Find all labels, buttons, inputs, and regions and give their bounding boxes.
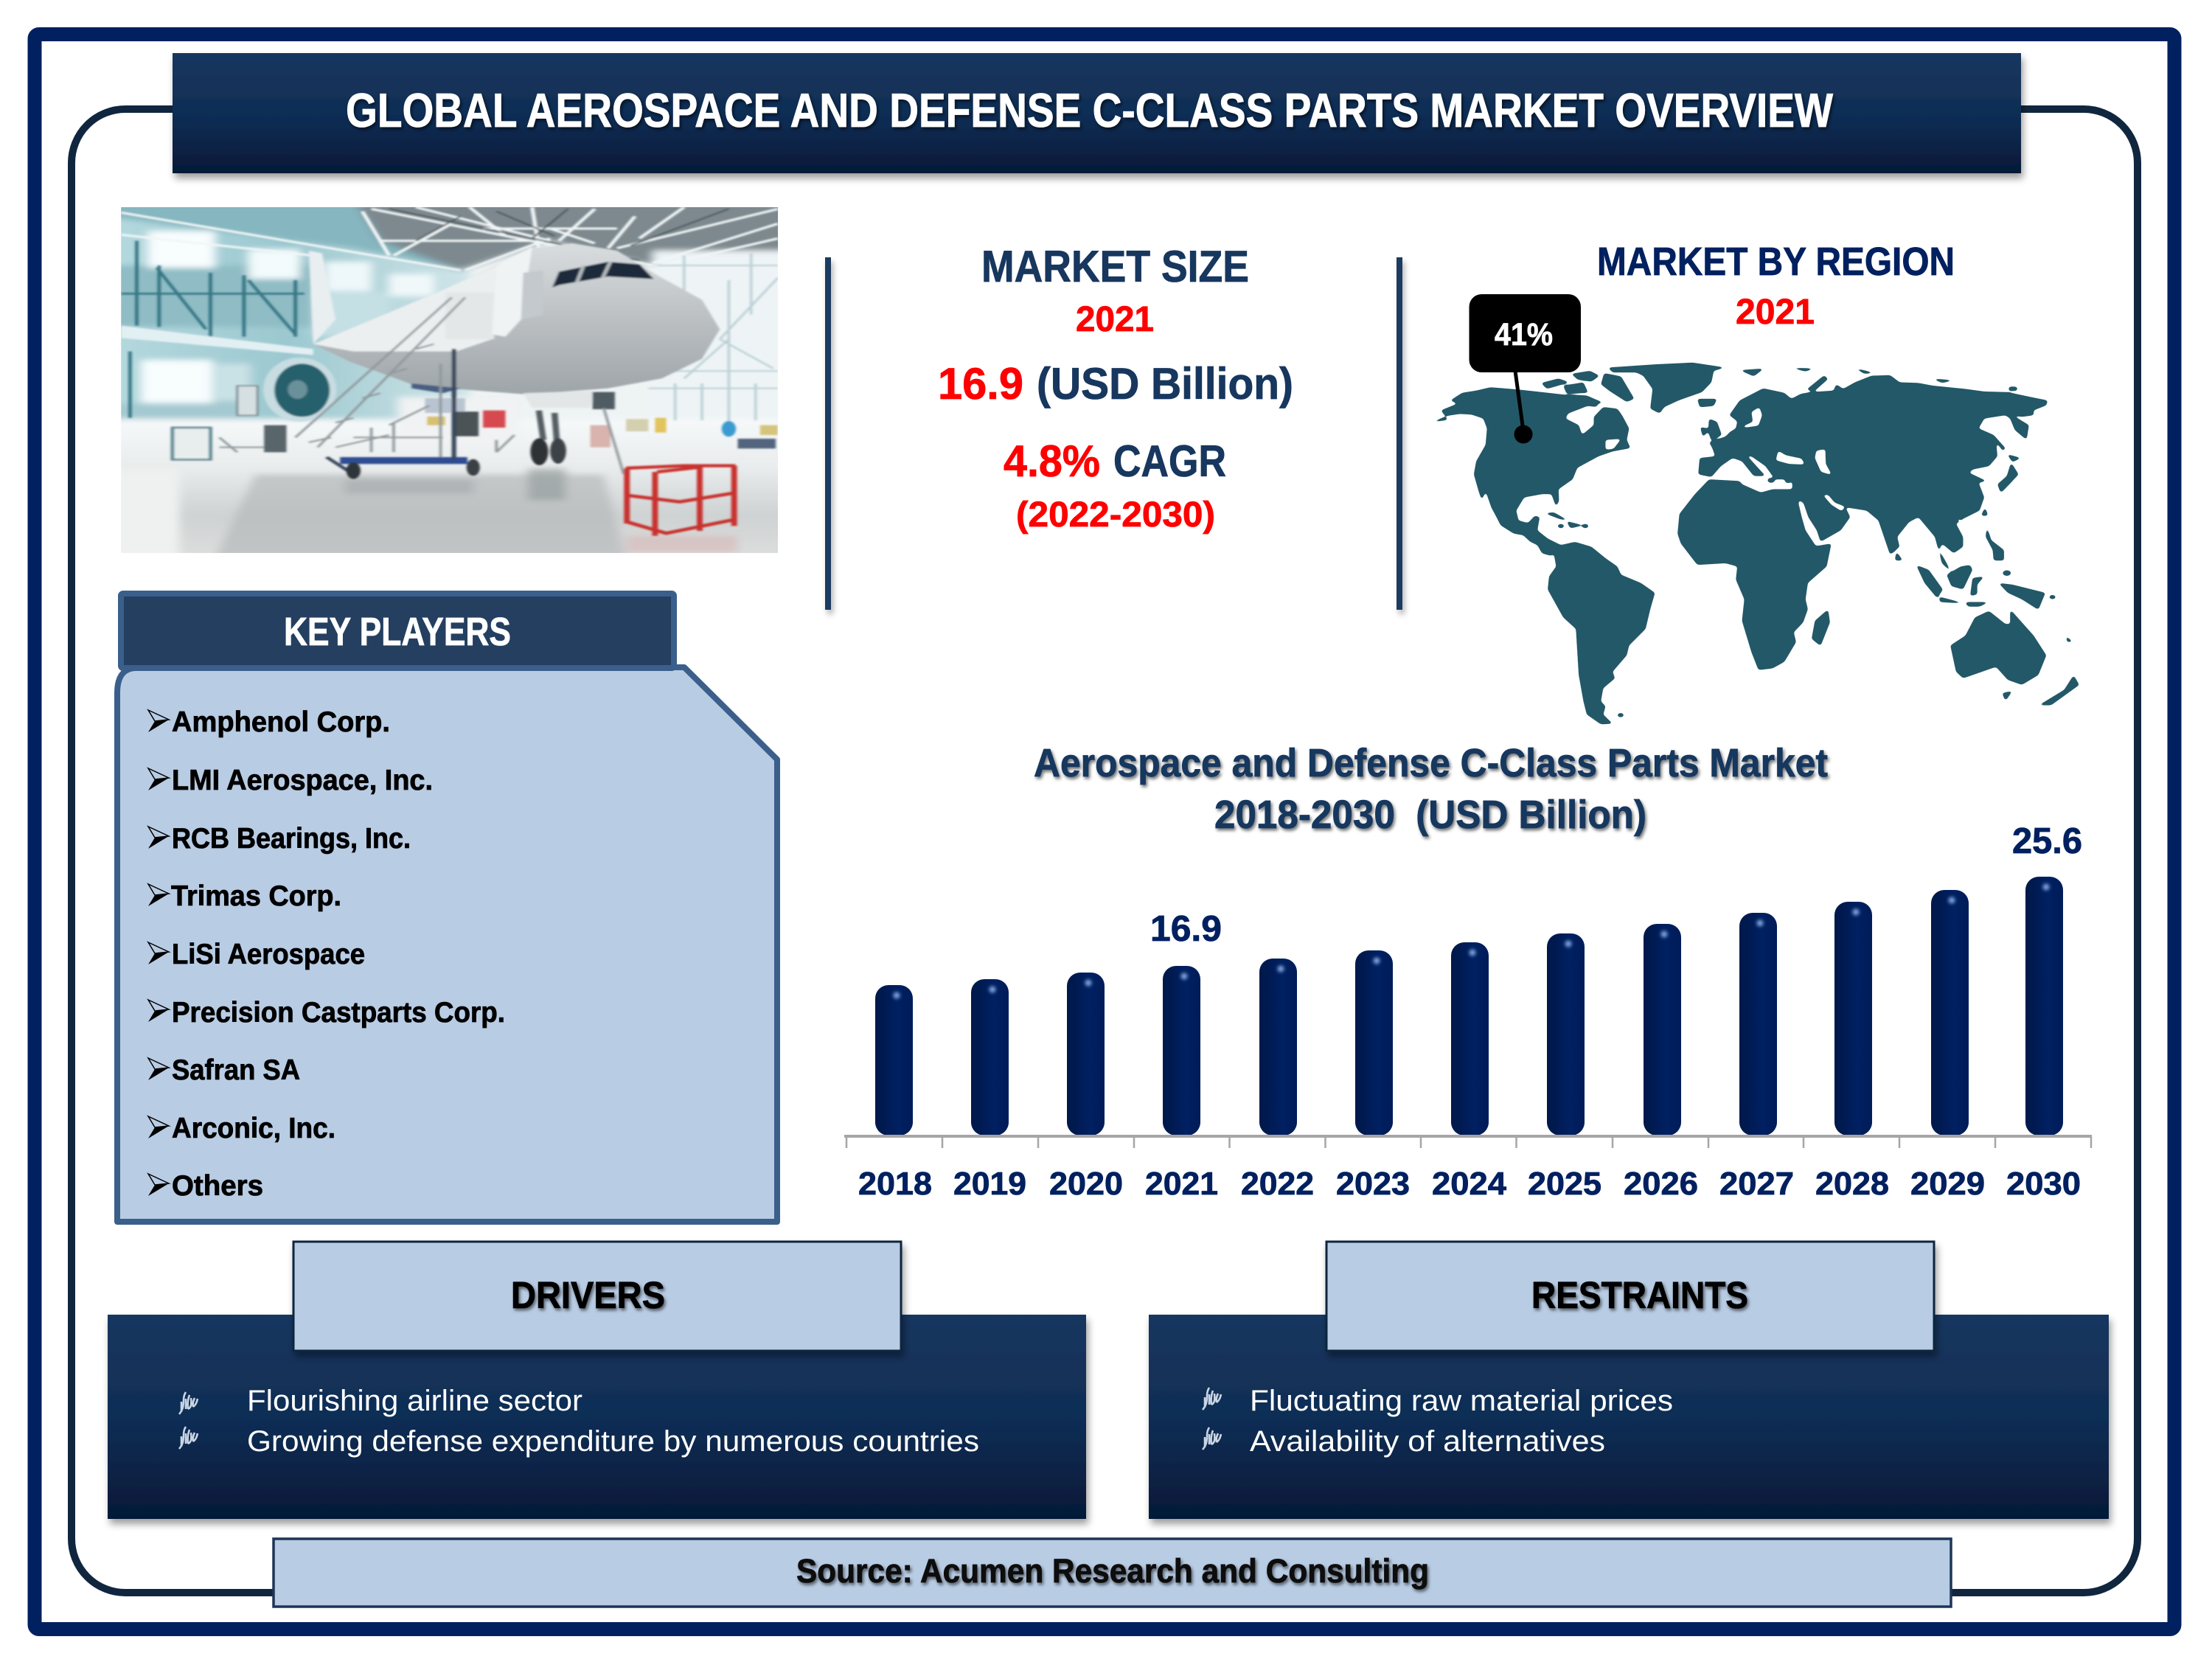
key players list body: LMI Aerospace, Inc. (172, 765, 433, 796)
photo: aircraft in hangar (103, 199, 796, 558)
market size block: (2022-2030) (1016, 495, 1215, 535)
key players list body: LiSi Aerospace (172, 939, 365, 970)
bar chart (844, 821, 2092, 1202)
drivers header (293, 1242, 901, 1351)
key players list body: Trimas Corp. (171, 880, 341, 912)
key players list body: RCB Bearings, Inc. (172, 823, 411, 855)
market size block: CAGR (1113, 437, 1226, 486)
chart title: 2018-2030 (USD Billion) (1214, 793, 1646, 837)
market size block: MARKET SIZE (981, 242, 1249, 291)
bar chart: 2023 (1336, 1166, 1410, 1202)
key players list body (117, 667, 777, 1222)
bar chart: 16.9 (1150, 909, 1222, 949)
bar chart: 2019 (953, 1166, 1026, 1202)
bar chart: 2029 (1910, 1166, 1985, 1202)
drivers bullet icons (179, 1392, 198, 1449)
bar chart: 2024 (1432, 1166, 1507, 1202)
key players header (121, 594, 674, 668)
bar chart: 2030 (2006, 1166, 2081, 1202)
key players header: KEY PLAYERS (284, 610, 511, 654)
world map (1430, 363, 2079, 724)
bar chart: 2018 (858, 1166, 932, 1202)
panel: drivers: Flourishing airline sector (247, 1385, 582, 1417)
market by region heading: MARKET BY REGION (1597, 240, 1955, 284)
bar chart: 2027 (1719, 1166, 1794, 1202)
source bar (274, 1539, 1951, 1607)
market by region heading (1597, 240, 1955, 332)
panel: restraints: Fluctuating raw material prices (1250, 1385, 1673, 1417)
bar chart: 2020 (1049, 1166, 1123, 1202)
bar chart: 2025 (1528, 1166, 1601, 1202)
bar chart: 2028 (1815, 1166, 1889, 1202)
callout: 41% North America (1469, 294, 1581, 444)
callout: 41% North America: 41% (1495, 317, 1553, 352)
vertical divider right (1397, 257, 1402, 610)
market size block: (USD Billion) (1037, 359, 1293, 408)
source bar: Source: Acumen Research and Consulting (796, 1552, 1429, 1590)
restraints header (1326, 1242, 1934, 1351)
market size block: 2021 (1076, 300, 1154, 339)
restraints header: RESTRAINTS (1531, 1274, 1748, 1316)
title banner: GLOBAL AEROSPACE AND DEFENSE C-CLASS PARTS MARKET OVERVIEW (346, 83, 1834, 137)
bar chart: 2021 (1145, 1166, 1218, 1202)
panel: drivers (108, 1242, 1086, 1519)
chart title: Aerospace and Defense C-Class Parts Market (1034, 741, 1828, 785)
market size block: 16.9 (938, 359, 1023, 408)
key players list body: Others (172, 1170, 263, 1202)
bar chart: 2022 (1241, 1166, 1314, 1202)
market by region heading: 2021 (1736, 293, 1815, 332)
key players panel (117, 594, 777, 1222)
restraints bullet icons (1203, 1388, 1221, 1450)
panel: drivers: Growing defense expenditure by numerous countries (247, 1425, 979, 1458)
panel: restraints: Availability of alternatives (1250, 1425, 1605, 1458)
panel: restraints (1149, 1242, 2109, 1519)
market size block: 4.8% (1004, 437, 1100, 486)
bar chart: 25.6 (2012, 821, 2082, 861)
drivers header: DRIVERS (511, 1274, 665, 1316)
key players list body: Safran SA (172, 1054, 300, 1086)
key players list body: Precision Castparts Corp. (172, 997, 505, 1029)
title banner (173, 53, 2021, 173)
market size block (938, 242, 1293, 535)
chart title (1034, 741, 1828, 837)
bar chart: 2026 (1624, 1166, 1698, 1202)
vertical divider left (825, 257, 831, 610)
key players list body: Arconic, Inc. (172, 1113, 335, 1144)
key players list body: Amphenol Corp. (172, 706, 390, 738)
